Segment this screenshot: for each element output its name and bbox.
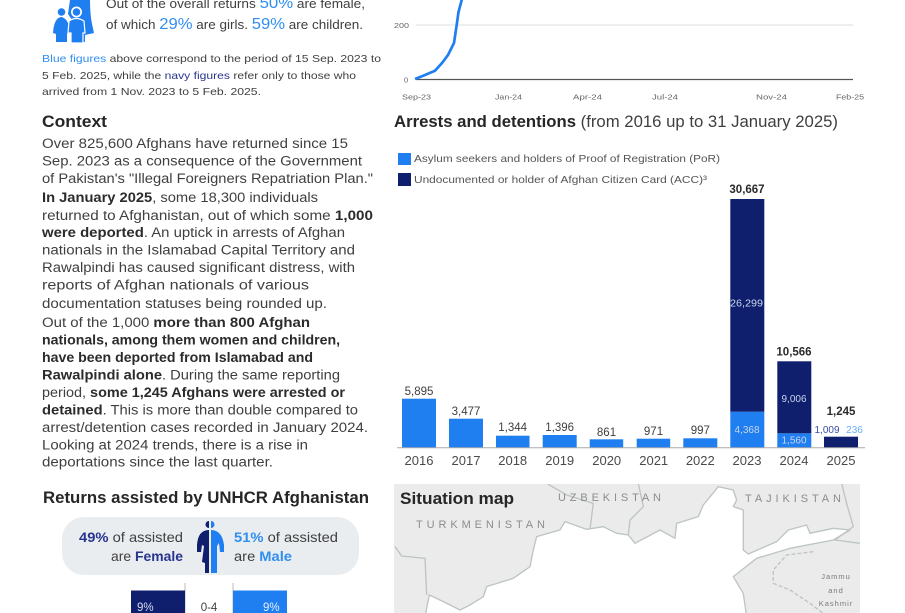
legend: arrest categories: Asylum seekers and holders of Proof of Registration (PoR)	[414, 153, 720, 165]
map labels	[416, 492, 853, 608]
legend: arrest categories	[398, 153, 720, 186]
map labels: TAJIKISTAN	[745, 493, 841, 505]
text: context paragraph one: Sep. 2023 as a consequence of the Government	[42, 154, 362, 168]
text: female share	[79, 529, 183, 564]
chart: arrests bar chart: 2022	[686, 453, 715, 468]
chart: arrests bar chart: 236	[846, 425, 863, 436]
text: context paragraph two: nationals, among them women and children,	[42, 332, 340, 348]
panel: situation map	[394, 483, 860, 613]
text: context paragraph two: have been deported from Islamabad and	[42, 350, 313, 365]
text: context paragraph one: In January 2025 , some 18,300 individuals	[42, 190, 318, 205]
heading: returns assisted: Returns assisted by UNHCR Afghanistan	[43, 489, 369, 507]
chart: arrests bar chart: 1,009	[814, 425, 840, 436]
chart: arrests bar chart: 2018	[498, 453, 527, 468]
chart: age and sex pyramid	[131, 583, 287, 613]
text: context paragraph two: Looking at 2024 trends, there is a rise in	[42, 438, 308, 452]
text: context paragraph one: Rawalpindi has caused significant distress, with	[42, 260, 355, 275]
text: context paragraph one: of Pakistan's "Illegal Foreigners Repatriation Plan."	[42, 171, 373, 186]
text: figures footnote	[42, 53, 381, 98]
icon: male and female figure	[197, 521, 224, 573]
chart: arrests bar chart: 1,344	[498, 422, 528, 434]
chart: returns line chart: Feb-25	[836, 92, 864, 102]
map: neighbouring borders	[395, 483, 860, 613]
text: context paragraph one	[41, 136, 373, 311]
chart: returns line chart: Nov-24	[756, 92, 787, 102]
text: context paragraph two	[42, 315, 368, 470]
chart: arrests bar chart: 2023	[733, 453, 761, 468]
chart: arrests bar chart: 10,566	[776, 346, 812, 358]
icon: family	[53, 0, 94, 43]
text: context paragraph two: detained . This is more than double compared to	[42, 402, 358, 418]
legend: arrest categories: Undocumented or holder of Afghan Citizen Card (ACC)³	[414, 174, 708, 186]
chart: returns line chart: 0	[404, 76, 408, 84]
chart: returns line chart	[394, 0, 864, 102]
chart: arrests bar chart: 2019	[545, 453, 574, 468]
text: context paragraph two: period, some 1,245 Afghans were arrested or	[42, 385, 346, 400]
map labels: UZBEKISTAN	[558, 492, 661, 504]
chart: returns line chart: Sep-23	[402, 92, 431, 102]
map labels: and	[828, 586, 844, 595]
text: context paragraph one: returned to Afghanistan, out of which some 1,000	[42, 208, 373, 223]
heading: arrests and detentions: Arrests and detentions (from 2016 up to 31 January 2025)	[394, 113, 838, 131]
panel: returns assisted by UNHCR	[43, 489, 369, 613]
chart: arrests bar chart: 3,477	[452, 406, 480, 418]
panel: demographics summary	[42, 0, 381, 98]
chart: arrests bar chart	[397, 184, 865, 468]
chart: returns line chart: Jul-24	[652, 92, 678, 102]
text: male share: are Male	[234, 548, 292, 564]
map labels: TURKMENISTAN	[416, 519, 545, 531]
chart: arrests bar chart: 997	[691, 425, 710, 437]
text: figures footnote: Blue figures above correspond to the period of 15 Sep. 2023 to	[42, 53, 381, 65]
text: context paragraph two: Rawalpindi alone . During the same reporting	[42, 368, 340, 382]
text: male share	[234, 529, 338, 564]
map: Afghanistan territory	[425, 487, 850, 613]
chart: arrests bar chart: 1,396	[545, 422, 574, 434]
map labels: Kashmir	[819, 599, 853, 608]
chart: arrests bar chart: 2024	[780, 453, 808, 468]
text: returns breakdown	[106, 0, 365, 33]
chart: arrests bar chart: 2016	[405, 453, 433, 468]
chart: returns line chart: 200	[394, 21, 409, 30]
map labels: Jammu	[821, 572, 851, 581]
text: context paragraph one: Over 825,600 Afghans have returned since 15	[42, 136, 348, 151]
chart: arrests bar chart: 2017	[452, 453, 480, 468]
text: female share: are Female	[111, 548, 183, 564]
text: context paragraph one: reports of Afghan nationals of various	[42, 278, 309, 292]
chart: returns line chart: Jan-24	[495, 92, 522, 102]
chart: arrests bar chart: 4,368	[734, 425, 760, 436]
chart: arrests bar chart: 2020	[592, 453, 621, 468]
chart: arrests bar chart: 861	[597, 427, 616, 439]
heading: situation map: Situation map	[400, 490, 514, 508]
text: context paragraph one: nationals in the Islamabad Capital Territory and	[42, 242, 355, 258]
chart: arrests bar chart: 30,667	[729, 184, 765, 196]
chart: arrests bar chart: 2021	[639, 453, 668, 468]
chart: arrests bar chart: 9,006	[781, 394, 807, 405]
text: figures footnote: 5 Feb. 2025, while the navy figures refer only to those who	[42, 70, 356, 82]
chart: arrests bar chart: 971	[644, 426, 663, 438]
text: context paragraph two: deportations since the last quarter.	[42, 454, 273, 470]
heading: context: Context	[42, 113, 108, 131]
text: context paragraph one: were deported . An uptick in arrests of Afghan	[41, 225, 345, 240]
text: male share: 51% of assisted	[234, 529, 338, 545]
chart: arrests bar chart: 5,895	[405, 386, 433, 398]
text: context paragraph one: documentation statuses being rounded up.	[42, 296, 327, 311]
text: figures footnote: arrived from 1 Nov. 2023 to 5 Feb. 2025.	[42, 86, 261, 98]
chart: arrests bar chart: 1,245	[827, 406, 856, 418]
chart: arrests bar chart: 26,299	[730, 298, 763, 310]
text: context paragraph two: arrest/detention cases recorded in January 2024.	[42, 420, 368, 435]
text: returns breakdown: of which 29% are girls. 59% are children.	[106, 16, 363, 33]
chart: arrests bar chart: 1,560	[781, 436, 807, 446]
text: context paragraph two: Out of the 1,000 more than 800 Afghan	[42, 315, 310, 330]
gender summary pill	[62, 517, 359, 575]
text: female share: 49% of assisted	[79, 529, 183, 545]
line: cumulative returns	[415, 0, 463, 79]
chart: returns line chart: Apr-24	[573, 92, 602, 102]
panel: context	[41, 113, 373, 470]
chart: arrests bar chart: 2025	[827, 453, 855, 468]
